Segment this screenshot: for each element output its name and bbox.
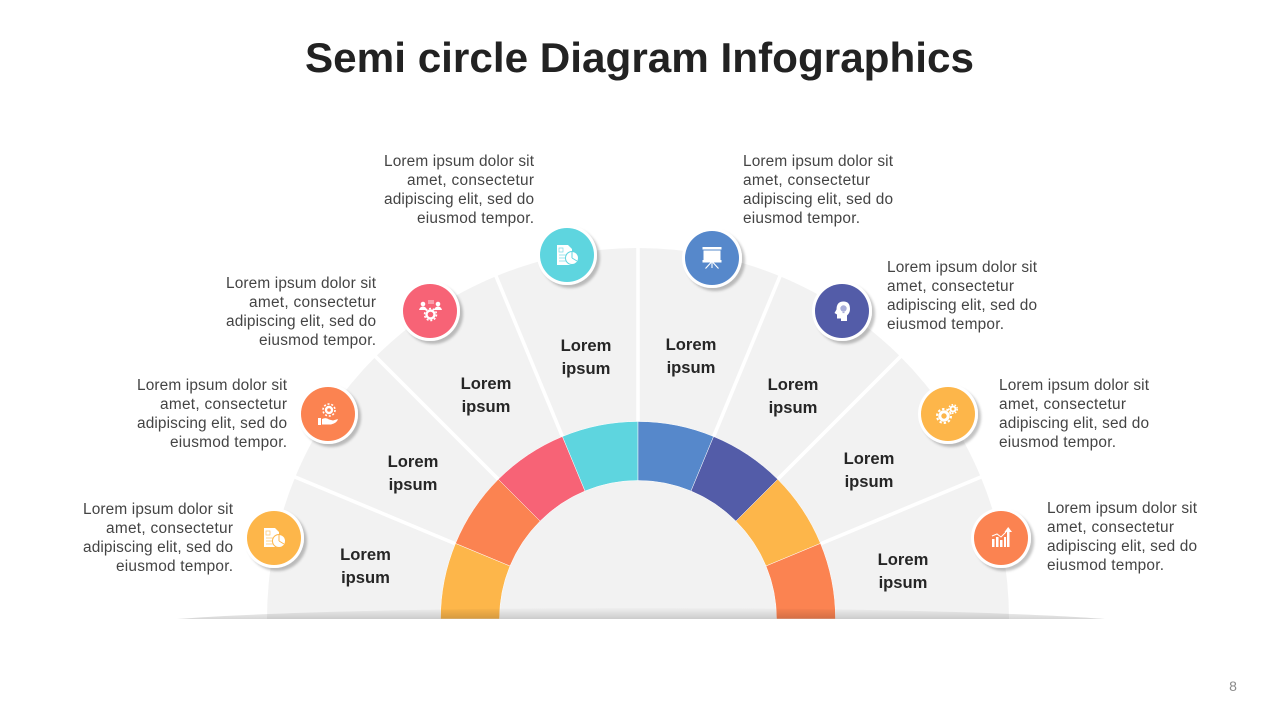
- text block 3: Lorem ipsum dolor sit: [226, 275, 377, 292]
- text block 7: adipiscing elit, sed do: [999, 415, 1149, 432]
- text block 7: Lorem ipsum dolor sit: [999, 377, 1150, 394]
- text block 3: adipiscing elit, sed do: [226, 313, 376, 330]
- text block 5: Lorem ipsum dolor sit: [743, 153, 894, 170]
- text block 2: amet, consectetur: [160, 396, 287, 413]
- text block 5: eiusmod tempor.: [743, 210, 860, 227]
- coloured semicircle ring: [440, 421, 836, 619]
- title: Semi circle Diagram Infographics: [305, 34, 974, 81]
- icon: hand and gear on orange circle: [298, 384, 358, 444]
- text block 3: [226, 275, 377, 349]
- segment label 3: ipsum: [462, 397, 510, 416]
- text block 6: amet, consectetur: [887, 278, 1014, 295]
- segment label 6: [768, 375, 818, 417]
- text block 2: adipiscing elit, sed do: [137, 415, 287, 432]
- base shadow: [177, 608, 1105, 619]
- segment label 7: Lorem: [844, 449, 894, 468]
- text block 3: eiusmod tempor.: [259, 332, 376, 349]
- segment label 6: Lorem: [768, 375, 818, 394]
- icon: growth chart on orange circle: [971, 508, 1031, 568]
- segment label 8: [878, 550, 928, 592]
- segment label 2: ipsum: [389, 475, 437, 494]
- segment label 5: ipsum: [667, 358, 715, 377]
- text block 8: Lorem ipsum dolor sit: [1047, 500, 1198, 517]
- text block 4: adipiscing elit, sed do: [384, 191, 534, 208]
- text block 2: Lorem ipsum dolor sit: [137, 377, 288, 394]
- segment label 2: Lorem: [388, 452, 438, 471]
- text block 1: Lorem ipsum dolor sit: [83, 501, 234, 518]
- text block 1: adipiscing elit, sed do: [83, 539, 233, 556]
- text block 8: eiusmod tempor.: [1047, 557, 1164, 574]
- text block 5: [743, 153, 894, 227]
- text block 8: [1047, 500, 1198, 574]
- text block 3: amet, consectetur: [249, 294, 376, 311]
- text block 7: eiusmod tempor.: [999, 434, 1116, 451]
- segment label 7: [844, 449, 894, 491]
- text block 4: amet, consectetur: [407, 172, 534, 189]
- text block 5: amet, consectetur: [743, 172, 870, 189]
- text block 7: [999, 377, 1150, 451]
- segment label 3: Lorem: [461, 374, 511, 393]
- segment label 1: ipsum: [341, 568, 390, 587]
- segment label 4: ipsum: [562, 359, 610, 378]
- icon: gears on yellow circle: [918, 384, 978, 444]
- page number: 8: [1229, 678, 1237, 694]
- text block 6: adipiscing elit, sed do: [887, 297, 1037, 314]
- text block 4: Lorem ipsum dolor sit: [384, 153, 535, 170]
- text block 5: adipiscing elit, sed do: [743, 191, 893, 208]
- text block 2: [137, 377, 288, 451]
- segment label 8: ipsum: [879, 573, 927, 592]
- text block 4: [384, 153, 535, 227]
- segment label 3: [461, 374, 511, 416]
- segment label 5: Lorem: [666, 335, 716, 354]
- text block 1: [83, 501, 234, 575]
- segment label 6: ipsum: [769, 398, 817, 417]
- icon: report on yellow circle: [244, 508, 304, 568]
- text block 8: adipiscing elit, sed do: [1047, 538, 1197, 555]
- text block 1: eiusmod tempor.: [116, 558, 233, 575]
- segment label 4: Lorem: [561, 336, 611, 355]
- icon: presentation board on blue circle: [682, 228, 742, 288]
- text block 6: [887, 259, 1038, 333]
- text block 7: amet, consectetur: [999, 396, 1126, 413]
- text block 6: Lorem ipsum dolor sit: [887, 259, 1038, 276]
- text block 2: eiusmod tempor.: [170, 434, 287, 451]
- segment label 5: [666, 335, 716, 377]
- segment label 7: ipsum: [845, 472, 893, 491]
- icon: report on cyan circle: [537, 225, 597, 285]
- text block 1: amet, consectetur: [106, 520, 233, 537]
- icon: people and gear on pink circle: [400, 281, 460, 341]
- segment label 1: [340, 545, 391, 587]
- text block 8: amet, consectetur: [1047, 519, 1174, 536]
- segment label 8: Lorem: [878, 550, 928, 569]
- text block 6: eiusmod tempor.: [887, 316, 1004, 333]
- segment label 4: [561, 336, 611, 378]
- icon: head with bulb on indigo circle: [812, 281, 872, 341]
- text block 4: eiusmod tempor.: [417, 210, 534, 227]
- segment label 2: [388, 452, 438, 494]
- segment label 1: Lorem: [340, 545, 391, 564]
- semicircle fan background: [267, 246, 1009, 619]
